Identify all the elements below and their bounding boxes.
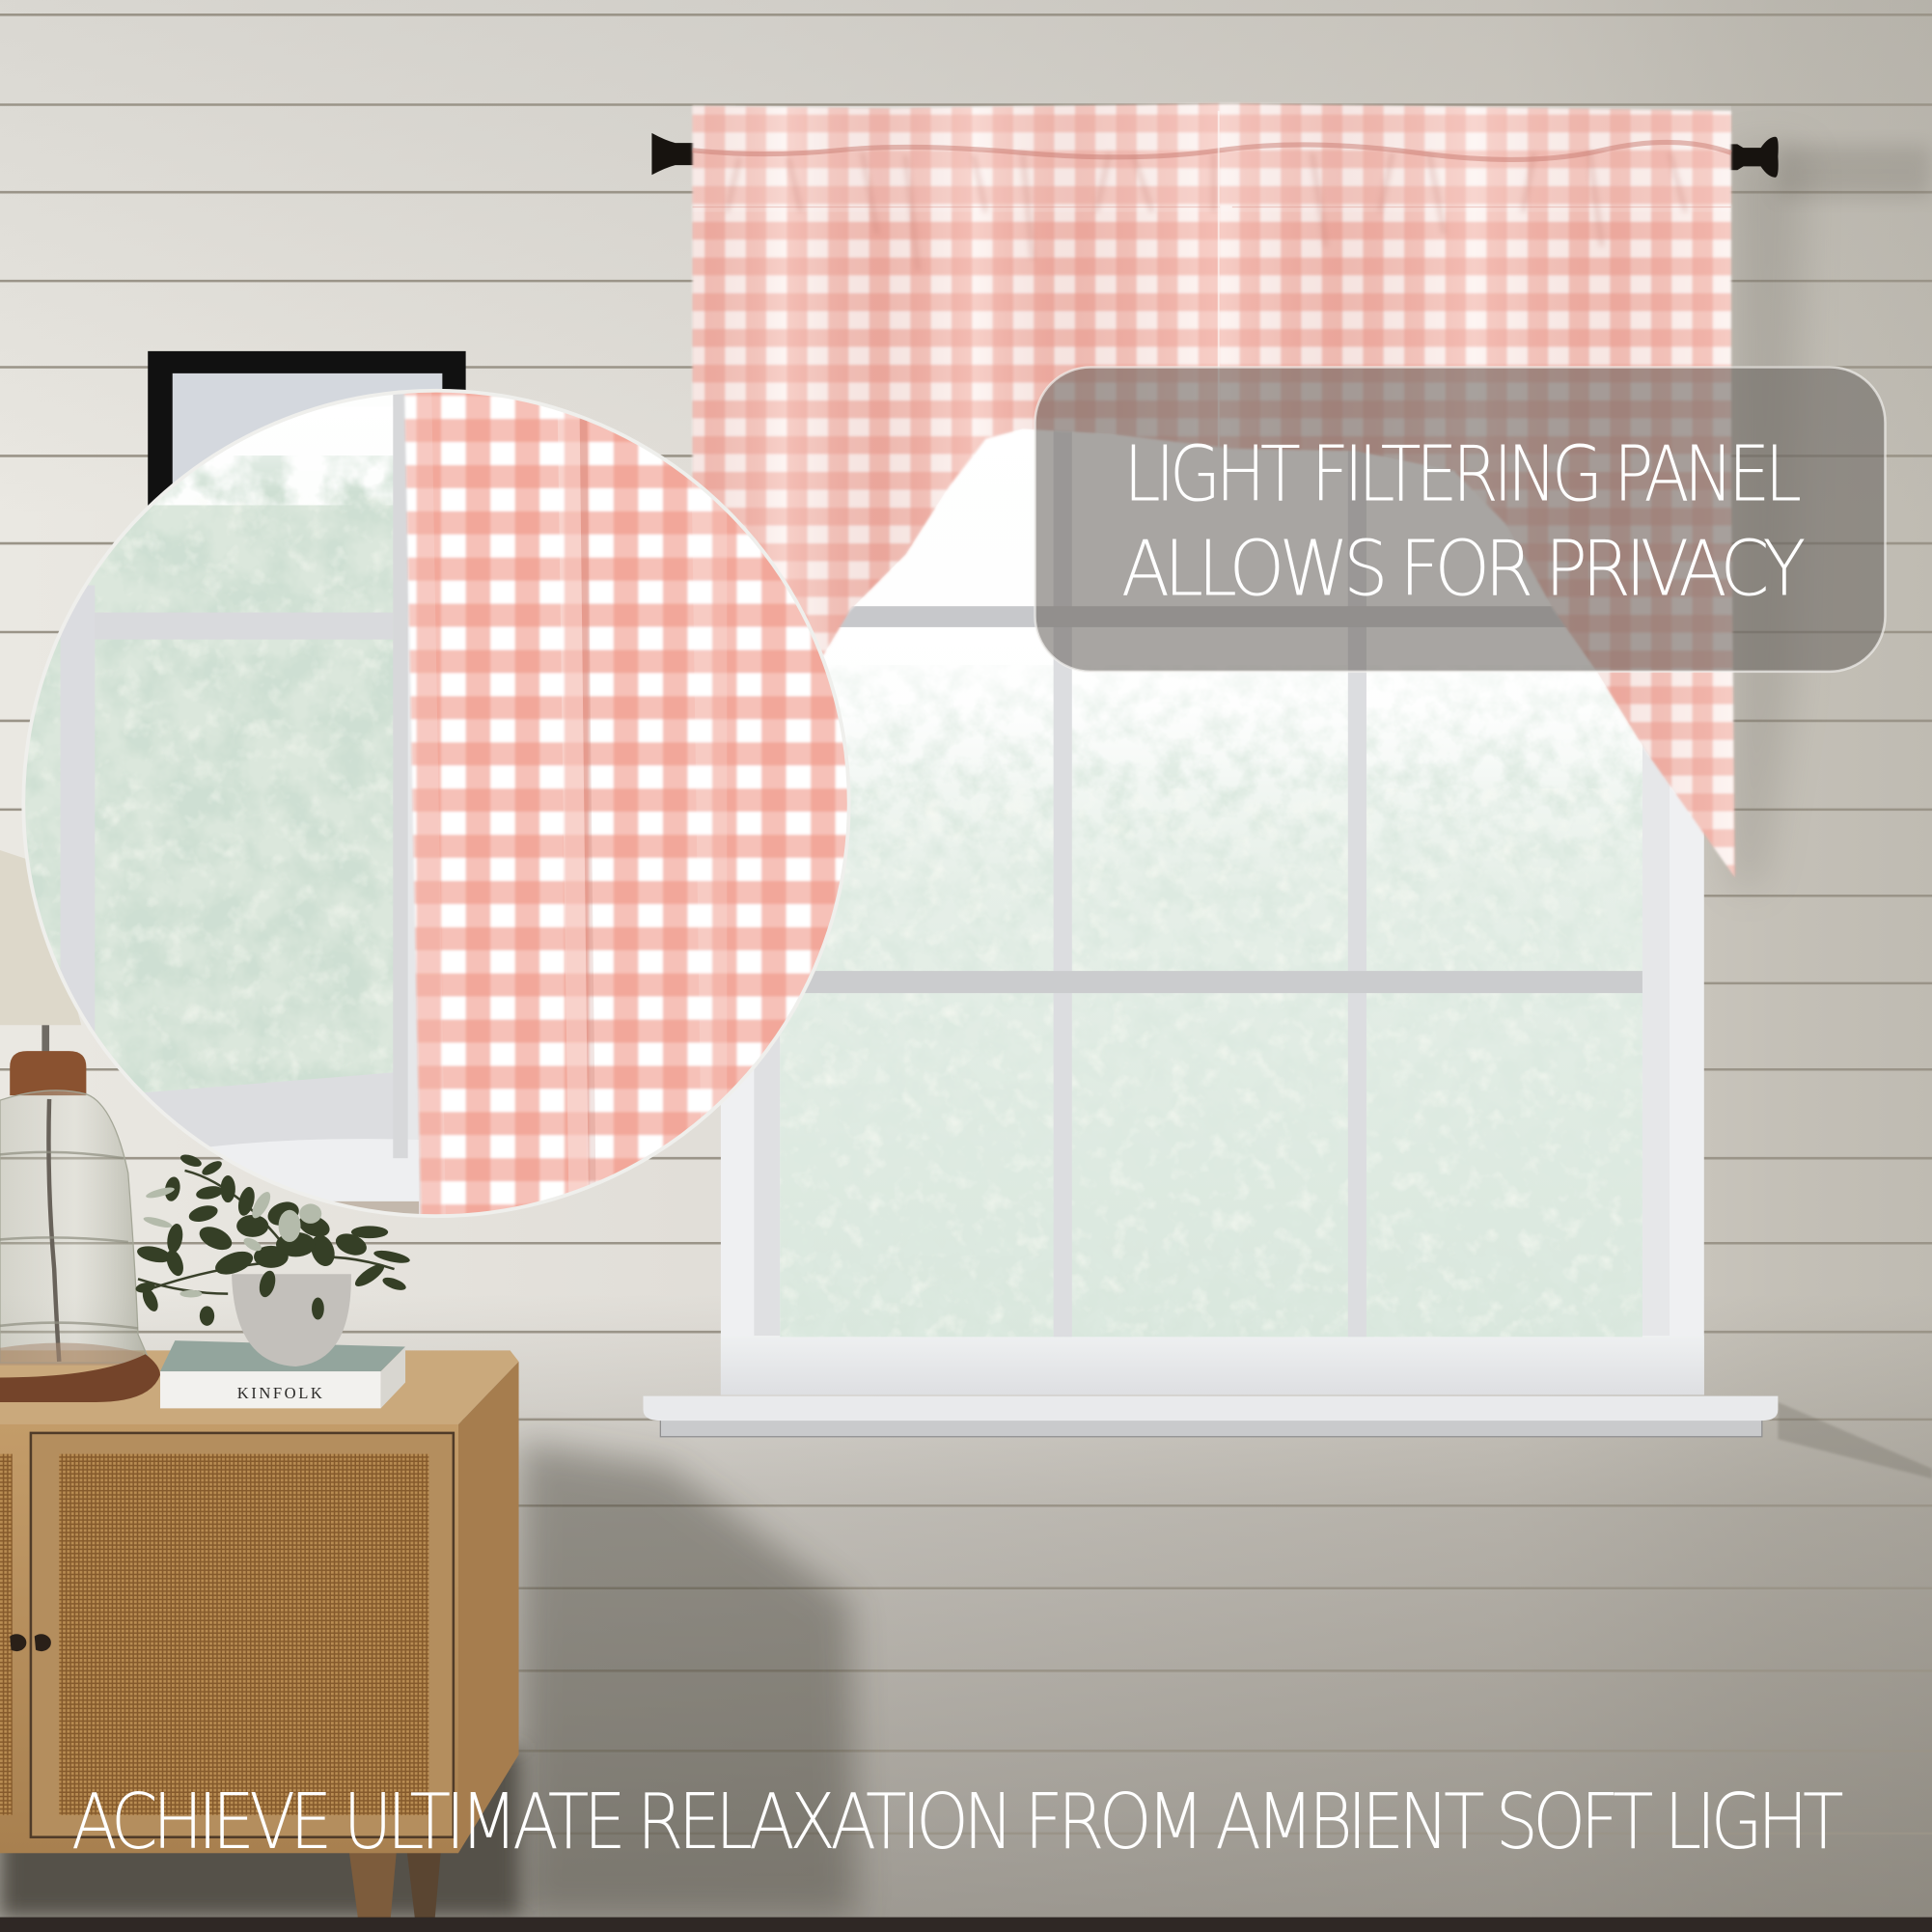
rattan door panel <box>59 1454 428 1815</box>
callout panel: light filtering <box>1035 367 1885 672</box>
dark leaves <box>135 1152 411 1326</box>
dark wall beneath cabinet <box>0 1750 521 1918</box>
stems <box>138 1171 395 1294</box>
wooden rattan cabinet <box>0 1350 519 1932</box>
book title: KINFOLK <box>237 1384 324 1402</box>
callout text: LIGHT FILTERING PANEL <box>1123 429 1800 518</box>
cast shadow lower left <box>521 1442 856 1918</box>
cabinet legs <box>348 1848 441 1932</box>
floor strip <box>0 1918 1932 1932</box>
curtain shadow on wall <box>1731 148 1805 887</box>
curtain rod with finials <box>651 133 1779 178</box>
lamp shade <box>0 850 81 1025</box>
callout text: ALLOWS FOR PRIVACY <box>1121 525 1805 614</box>
window view inside circle <box>18 395 419 1223</box>
sill shadow <box>1778 1402 1932 1478</box>
gingham swag curtain <box>693 103 1735 877</box>
enlarged gingham fabric <box>404 370 863 1232</box>
book <box>160 1340 405 1408</box>
magnified fabric detail circle <box>0 370 863 1232</box>
glass dome <box>0 1090 151 1363</box>
callout text <box>1121 429 1805 614</box>
potted plant <box>135 1152 411 1366</box>
table lamp <box>0 850 160 1402</box>
window <box>643 419 1778 1437</box>
rod shadow <box>1778 146 1932 197</box>
rod pocket ruffle <box>693 106 1731 271</box>
pot <box>232 1274 351 1366</box>
framed picture on wall <box>148 351 466 524</box>
lamp base <box>0 1354 160 1402</box>
door knobs <box>10 1634 51 1651</box>
pale variegated leaves <box>143 1185 321 1297</box>
window sill <box>643 1396 1778 1437</box>
